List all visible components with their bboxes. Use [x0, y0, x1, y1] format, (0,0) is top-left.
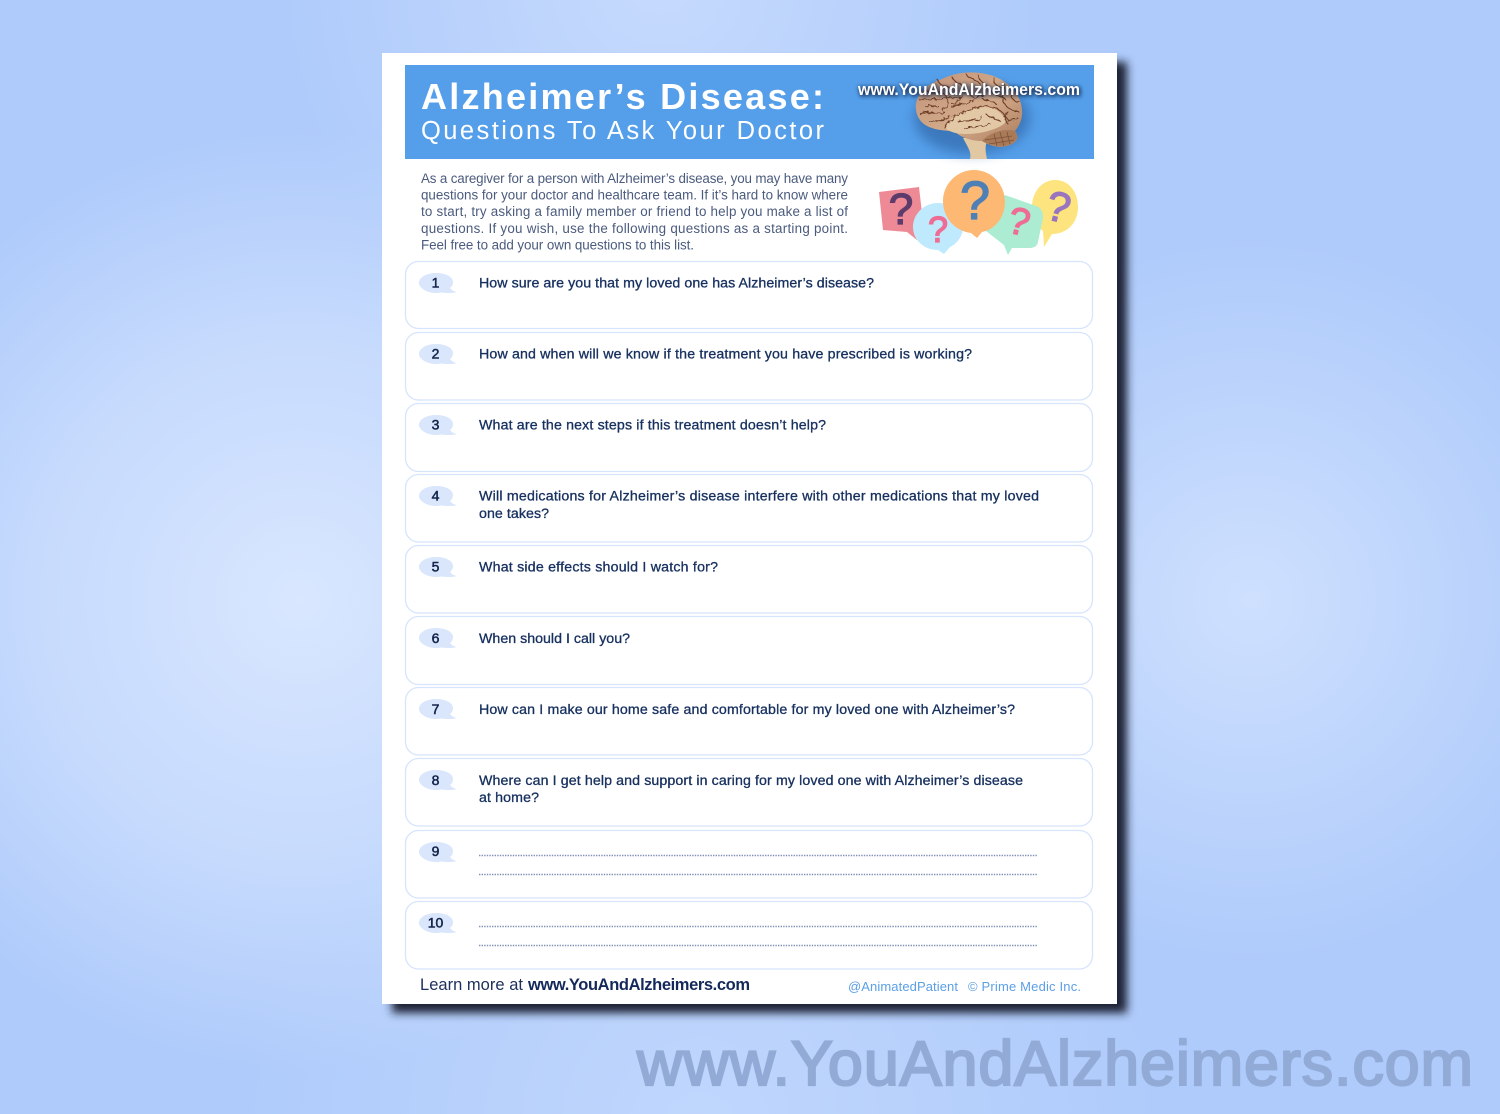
icon: brain	[914, 72, 1030, 159]
title: Alzheimer’s Disease:	[421, 76, 824, 117]
question 6: When should I call you?	[479, 631, 630, 647]
icon: question speech bubbles: ?	[1041, 181, 1076, 233]
icon: question speech bubbles	[879, 170, 1078, 255]
question 10 blank: 10	[428, 914, 443, 930]
question 8: Where can I get help and support in caring for my loved one with Alzheimer’s disease	[479, 773, 1023, 789]
footer credits: @AnimatedPatient	[848, 979, 958, 994]
question 2: How and when will we know if the treatment you have prescribed is working?	[479, 346, 972, 362]
question 2: 2	[432, 346, 440, 362]
question 7: How can I make our home safe and comfortable for my loved one with Alzheimer’s?	[479, 702, 1015, 718]
question 8	[406, 758, 1092, 826]
icon: question speech bubbles: ?	[928, 209, 948, 250]
intro text: Feel free to add your own questions to this list.	[421, 238, 694, 252]
intro text: questions for your doctor and healthcare team. If it’s hard to know where	[421, 188, 848, 202]
question 4: one takes?	[479, 506, 549, 522]
question 1: 1	[432, 274, 440, 290]
worksheet page	[382, 53, 1117, 1004]
card shadow	[392, 62, 1127, 1013]
question 8: 8	[432, 772, 440, 788]
question 8: at home?	[479, 790, 539, 806]
question 6: 6	[432, 630, 440, 646]
question 5: What side effects should I watch for?	[479, 560, 718, 576]
question 4: Will medications for Alzheimer’s disease interfere with other medications that my loved	[479, 488, 1039, 504]
question 2	[406, 332, 1092, 400]
question 6	[406, 616, 1092, 684]
question 9 blank: 9	[432, 843, 440, 859]
intro text	[421, 171, 848, 252]
footer learn more	[420, 976, 750, 994]
question 10 blank	[406, 902, 1092, 969]
question 7	[406, 688, 1092, 755]
question 1: How sure are you that my loved one has Alzheimer’s disease?	[479, 276, 874, 292]
icon: question speech bubbles: ?	[889, 185, 913, 234]
question 4	[406, 474, 1092, 542]
question 3: 3	[432, 416, 440, 432]
icon: question speech bubbles: ?	[1004, 199, 1034, 245]
footer credits: © Prime Medic Inc.	[968, 979, 1081, 994]
question 5: 5	[432, 558, 440, 574]
question 7: 7	[432, 701, 440, 717]
intro text: to start, try asking a family member or friend to help you make a list of	[421, 204, 848, 219]
footer learn more: Learn more at	[420, 976, 523, 994]
intro text: As a caregiver for a person with Alzheimer’s disease, you may have many	[421, 171, 848, 186]
question 9 blank	[406, 830, 1092, 898]
question 5	[406, 546, 1092, 613]
question 1	[406, 262, 1092, 328]
footer learn more: www.YouAndAlzheimers.com	[527, 976, 750, 994]
question 3: What are the next steps if this treatment doesn’t help?	[479, 418, 826, 434]
watermark url: www.YouAndAlzheimers.com	[636, 1029, 1473, 1099]
subtitle: Questions To Ask Your Doctor	[421, 117, 824, 145]
header banner	[405, 65, 1094, 159]
intro text: questions. If you wish, use the following questions as a starting point.	[421, 221, 848, 236]
website url shadow: www.YouAndAlzheimers.com	[858, 81, 1081, 100]
question 3	[406, 404, 1092, 472]
website url: www.YouAndAlzheimers.com	[857, 80, 1080, 99]
question 4: 4	[432, 488, 440, 504]
footer credits	[848, 979, 1081, 994]
icon: question speech bubbles: ?	[960, 171, 990, 231]
